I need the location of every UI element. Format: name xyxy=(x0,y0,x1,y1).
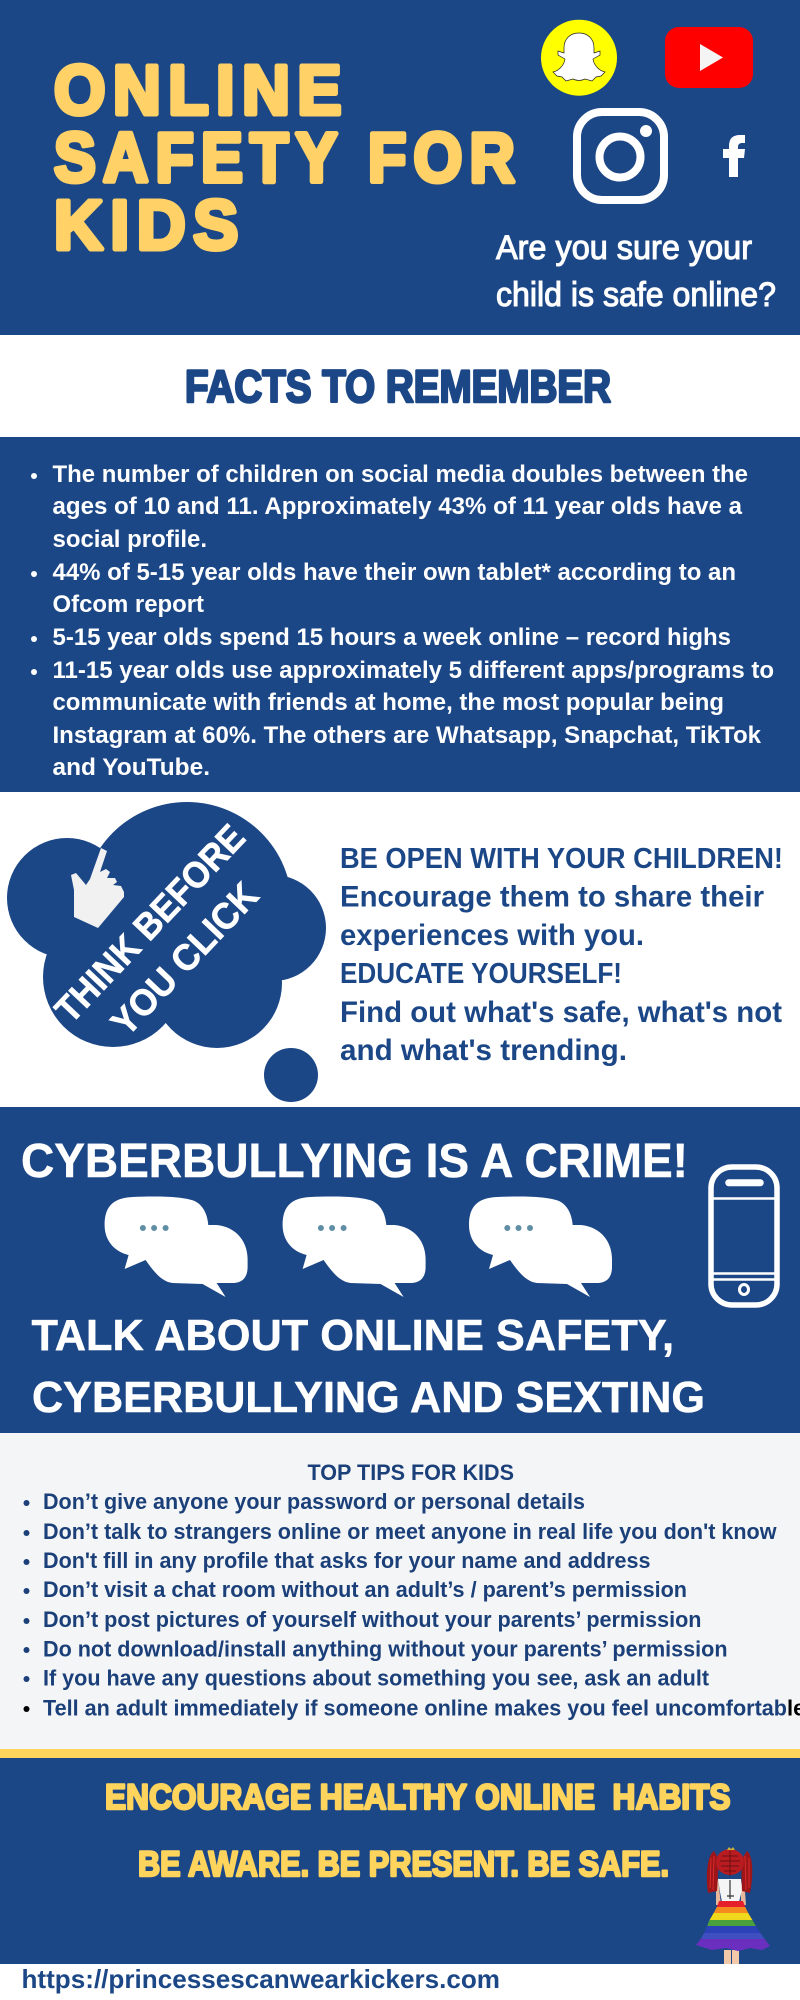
thought cloud xyxy=(7,802,326,1102)
icon: speech bubbles 3 xyxy=(469,1196,612,1297)
panel: facts list: and YouTube. xyxy=(52,754,210,781)
title xyxy=(54,51,522,264)
closing slogans: ENCOURAGE HEALTHY ONLINE HABITS xyxy=(105,1778,730,1817)
tips list xyxy=(24,1489,800,1720)
panel: encourage healthy habits xyxy=(0,1758,800,1964)
tagline: Are you sure your xyxy=(496,229,752,267)
advice text: and what's trending. xyxy=(340,1034,627,1067)
website url: https://princessescanwearkickers.com xyxy=(22,1964,500,1994)
advice text: BE OPEN WITH YOUR CHILDREN! xyxy=(340,843,783,875)
tips list: Don’t talk to strangers online or meet anyone in real life you don't know xyxy=(43,1519,777,1544)
panel: facts list: 11-15 year olds use approximately 5 different apps/programs to xyxy=(52,657,774,684)
heading: facts to remember: FACTS TO REMEMBER xyxy=(185,361,611,412)
tips heading: TOP TIPS FOR KIDS xyxy=(308,1460,514,1485)
tips list: If you have any questions about something you see, ask an adult xyxy=(43,1666,710,1690)
panel: top tips for kids xyxy=(0,1433,800,1749)
panel: facts list: 5-15 year olds spend 15 hours a week online – record highs xyxy=(52,624,731,651)
divider: yellow band xyxy=(0,1749,800,1758)
panel: facts list: communicate with friends at home, the most popular being xyxy=(52,689,724,716)
title: KIDS xyxy=(54,186,246,264)
icon: speech bubbles 1 xyxy=(105,1196,248,1297)
heading: facts to remember xyxy=(0,335,800,437)
illustration: girl in rainbow skirt xyxy=(696,1847,770,1964)
panel: facts list: social profile. xyxy=(52,526,207,553)
panel: facts list: Instagram at 60%. The others are Whatsapp, Snapchat, TikTok xyxy=(52,722,762,749)
closing slogans: BE AWARE. BE PRESENT. BE SAFE. xyxy=(138,1845,669,1884)
panel: cyberbullying xyxy=(0,1107,800,1433)
cloud text: YOU CLICK xyxy=(103,874,267,1044)
tips list: Don’t visit a chat room without an adult’s / parent’s permission xyxy=(43,1577,687,1602)
panel: facts list: The number of children on social media doubles between the xyxy=(52,461,748,488)
advice text: EDUCATE YOURSELF! xyxy=(340,958,622,990)
advice text: Encourage them to share their xyxy=(340,880,764,914)
icon: speech bubbles 2 xyxy=(283,1196,426,1297)
title: ONLINE xyxy=(54,51,349,129)
talk about text: CYBERBULLYING AND SEXTING xyxy=(32,1373,705,1422)
talk about text: TALK ABOUT ONLINE SAFETY, xyxy=(32,1311,674,1360)
advice text: Find out what's safe, what's not xyxy=(340,996,782,1029)
closing slogans xyxy=(105,1778,730,1884)
icon: instagram xyxy=(577,112,664,200)
heading: cyberbullying is a crime: CYBERBULLYING IS A CRIME! xyxy=(21,1135,688,1188)
website url xyxy=(0,1964,800,2000)
icon: snapchat xyxy=(541,20,617,96)
panel: facts list: ages of 10 and 11. Approximately 43% of 11 year olds have a xyxy=(52,493,743,520)
panel: header xyxy=(0,0,800,335)
tagline: child is safe online? xyxy=(496,276,776,314)
panel: facts list: Ofcom report xyxy=(52,591,204,618)
tips list: Don’t give anyone your password or personal details xyxy=(43,1489,585,1514)
tips list: Don’t post pictures of yourself without your parents’ permission xyxy=(43,1607,702,1632)
cloud text: THINK BEFORE xyxy=(47,817,253,1031)
panel: facts list: 44% of 5-15 year olds have their own tablet* according to an xyxy=(52,559,736,586)
advice text xyxy=(340,843,783,1067)
tagline xyxy=(496,229,776,314)
title: SAFETY FOR xyxy=(54,118,522,196)
advice text: experiences with you. xyxy=(340,919,644,952)
icon: facebook xyxy=(723,135,745,177)
talk about text xyxy=(32,1311,705,1422)
panel: think before you click xyxy=(0,792,800,1107)
icon: youtube xyxy=(665,27,753,88)
icon: pointing hand xyxy=(71,848,124,928)
tips list: Don't fill in any profile that asks for your name and address xyxy=(43,1548,650,1573)
tips list: Tell an adult immediately if someone online makes you feel uncomfortab xyxy=(43,1696,787,1720)
icon: smartphone xyxy=(711,1167,777,1305)
tips list: Do not download/install anything without your parents’ permission xyxy=(43,1636,728,1662)
panel: facts list xyxy=(0,437,800,792)
